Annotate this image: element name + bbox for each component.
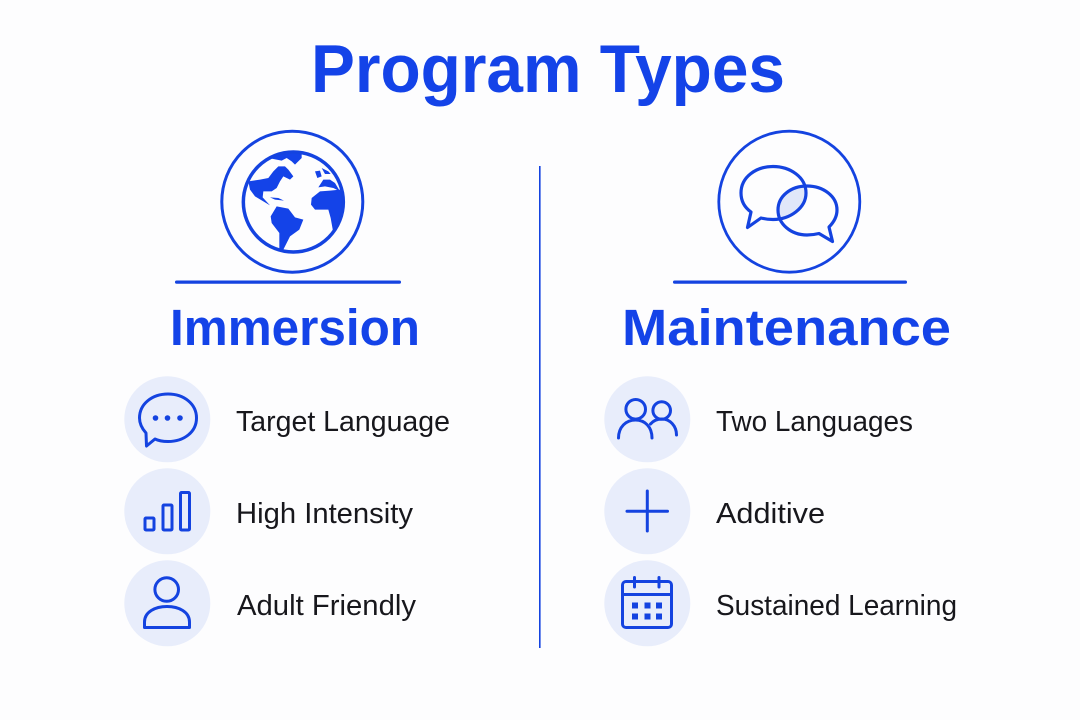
icon: calendar	[604, 560, 690, 646]
panel: immersion	[124, 131, 450, 646]
icon: person	[124, 560, 210, 646]
label: Adult Friendly	[237, 590, 416, 622]
icon: overlapping speech bubbles	[719, 131, 860, 272]
label: Target Language	[236, 406, 450, 438]
heading: immersion: Immersion	[170, 299, 420, 356]
panel: maintenance	[604, 131, 957, 646]
icon: speech bubble	[124, 376, 210, 462]
item: additive	[604, 468, 825, 554]
label: Two Languages	[716, 406, 913, 438]
item: adult friendly	[124, 560, 416, 646]
label: Sustained Learning	[716, 590, 957, 622]
item: two languages	[604, 376, 913, 462]
label: High Intensity	[236, 498, 413, 530]
icon: signal bars	[124, 468, 210, 554]
icon: two people	[604, 376, 690, 462]
icon: globe	[222, 131, 363, 272]
item: high intensity	[124, 468, 413, 554]
label: Additive	[716, 498, 825, 530]
center divider	[539, 166, 541, 648]
underline	[673, 280, 907, 284]
heading: maintenance: Maintenance	[622, 299, 951, 356]
underline	[175, 280, 401, 284]
icon: plus	[604, 468, 690, 554]
item: target language	[124, 376, 450, 462]
item: sustained learning	[604, 560, 957, 646]
title: Program Types	[311, 31, 785, 107]
